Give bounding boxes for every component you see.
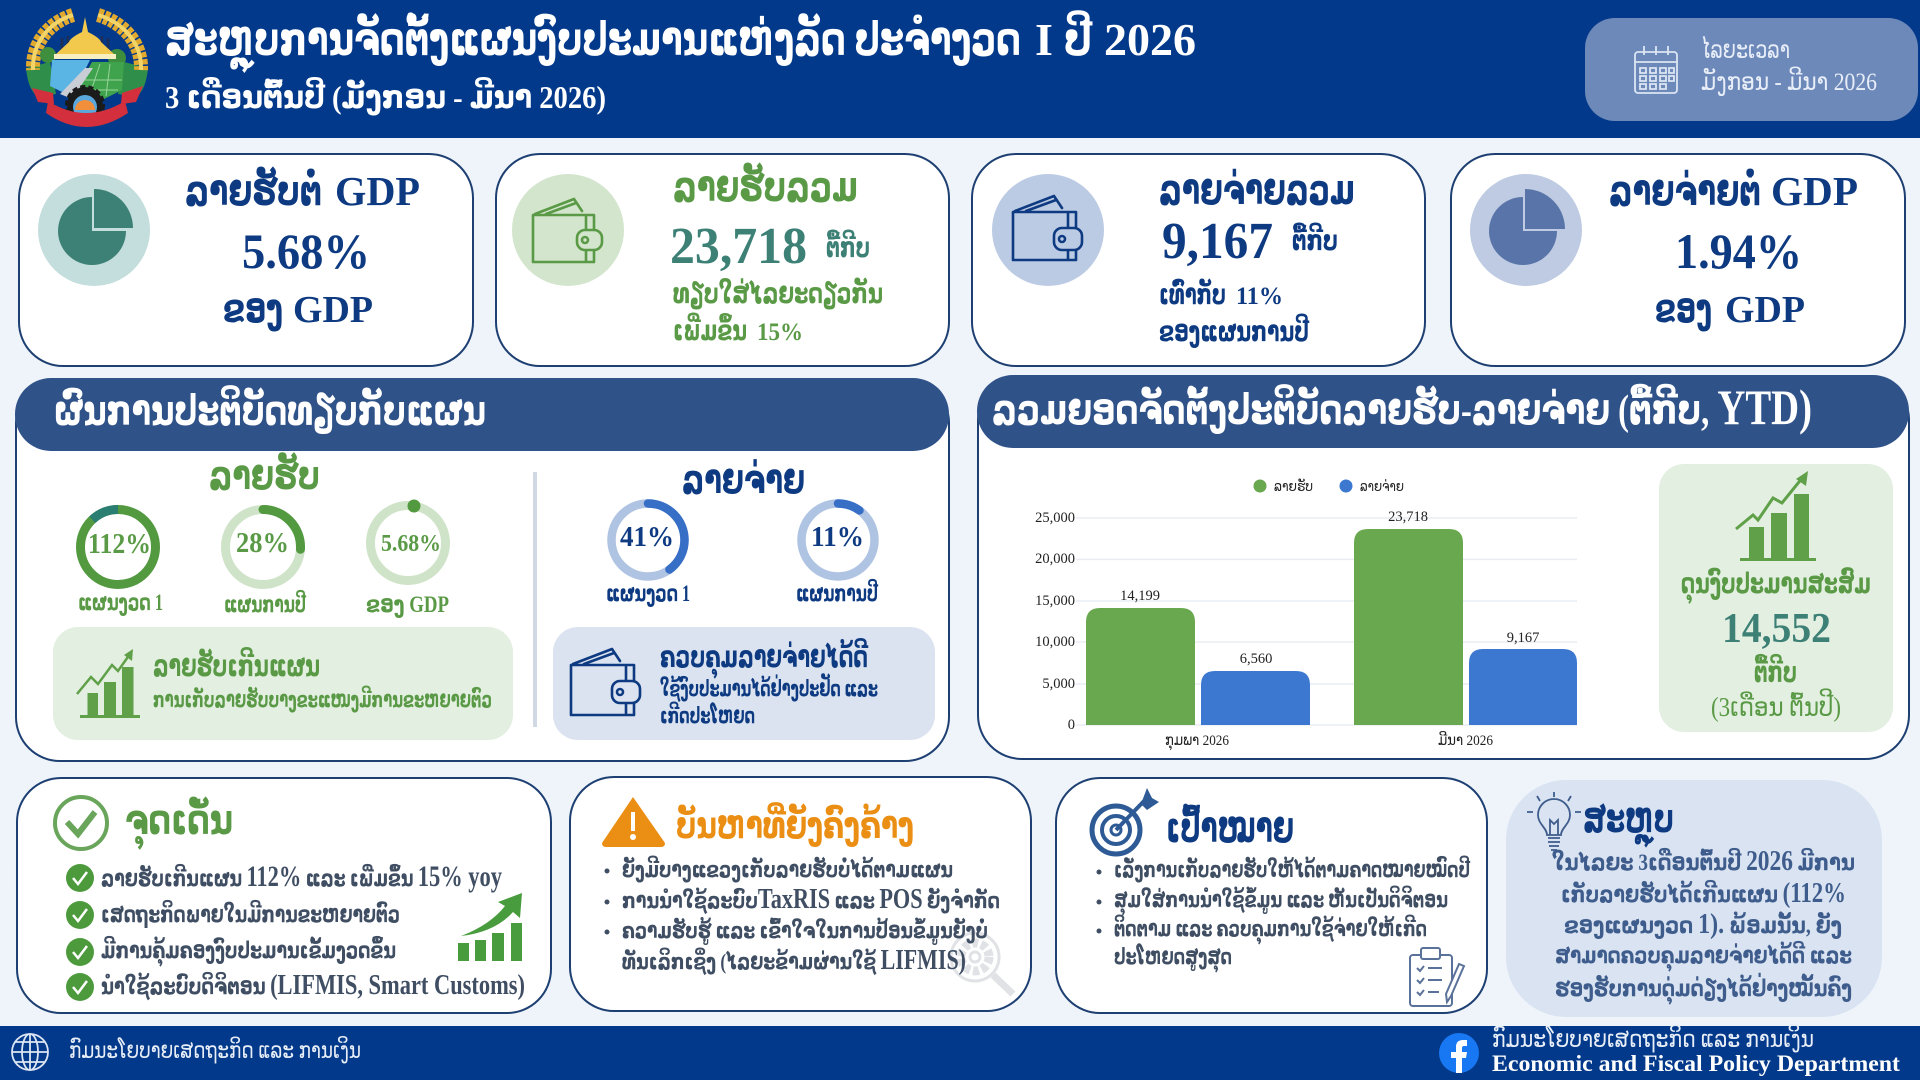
caption: ຂອງ [223,286,283,332]
heading: ລາຍຈ່າຍຕໍ່ [1609,167,1761,215]
callout: cumulative budget balance [1659,464,1893,732]
department name Lao: ກົມນະໂຍບາຍເສດຖະກິດ ແລະ ການເງິນ [1492,1024,1814,1053]
axis labels [1035,510,1075,733]
donut: 5.68% of GDP [366,500,449,618]
panel: targets [1056,778,1487,1013]
legend [1254,479,1404,495]
icon: rising bar chart [77,649,140,718]
unit: ຕື້ກີບ [1754,654,1797,689]
caption: ຂອງ [1655,286,1712,332]
summary text: ເກັບລາຍຮັບໄດ້ເກີນແຜນ (112% [1561,878,1846,909]
axis labels: 0 [1068,717,1075,733]
icon: target with arrow [1092,788,1159,854]
icon: check circle [55,797,107,849]
unit: ຕື້ກີບ [1292,222,1338,257]
category labels: ກຸມພາ 2026 [1165,733,1229,751]
bar chart [1035,479,1577,751]
heading: GDP [1771,168,1858,214]
comparison text: ທຽບໃສ່ໄລຍະດຽວກັນ [673,277,883,310]
highlight 3 [66,935,396,968]
callout title: ລາຍຮັບເກີນແຜນ [153,647,320,683]
value: 5.68% [242,223,370,279]
heading: GDP [335,168,420,214]
value: 23,718 [670,218,807,275]
donut: 112% of Q1 plan: 112% [88,529,151,560]
heading: ລາຍຮັບຕໍ່ [185,165,322,215]
caption [223,286,373,332]
value labels: 9,167 [1507,630,1539,646]
highlight 1: ລາຍຮັບເກີນແຜນ 112% ແລະ ເພີ່ມຂຶ້ນ 15% yoy [101,860,502,893]
panel: cumulative revenue and expenditure [977,375,1909,759]
donut: 11% of annual plan: ແຜນການປີ [796,578,879,606]
issue list: ຍັງມີບາງແຂວງເກັບລາຍຮັບບໍ່ໄດ້ຕາມແຜນ [622,856,953,882]
comparison text: ຂອງແຜນການປີ [1159,313,1310,348]
period value: ມັງກອນ - ມີນາ 2026 [1701,67,1877,96]
comparison text: 15% [757,319,803,346]
highlight 2 [66,899,400,929]
value: 14,552 [1722,606,1831,652]
donut: 5.68% of GDP: ຂອງ GDP [366,592,449,618]
title: I [1035,14,1053,65]
icon: globe [12,1034,48,1070]
heading: ສະຫຼຸບ [1583,796,1674,848]
heading: ລາຍຈ່າຍລວມ [1159,168,1355,214]
issue list: ທັນເລິກເຊິ່ງ (ໄລຍະຂ້າມຜ່ານໃຊ້ LIFMIS) [622,945,966,976]
subtitle: 3 ເດືອນຕົ້ນປີ (ມັງກອນ - ມີນາ 2026) [165,77,606,116]
legend: ລາຍຈ່າຍ [1360,479,1404,495]
icon: green wallet [512,174,624,286]
KPI card: revenue to GDP [19,154,473,366]
icon: rising bar chart [1736,471,1816,561]
title: ສະຫຼຸບການຈັດຕັ້ງແຜນງົບປະມານແຫ່ງລັດ ປະຈຳງວດ [165,12,1021,73]
donut: 28% of annual plan: 28% [236,528,289,559]
comparison text: 11% [1236,283,1283,310]
period note: (3ເດືອນ ຕົ້ນປີ) [1711,689,1841,722]
caption: GDP [1725,289,1805,331]
bars [1086,529,1577,725]
donut: 28% of annual plan [224,510,307,617]
donut: 112% of Q1 plan: ແຜນງວດ 1 [78,590,163,616]
issue list: ການນຳໃຊ້ລະບົບTaxRIS ແລະ POS ຍັງຈຳກັດ [622,884,1000,915]
summary text: ຂອງແຜນງວດ 1). ພ້ອມນັ້ນ, ຍັງ [1564,909,1842,940]
unit: ຕື້ກີບ [826,229,870,264]
highlight list [66,860,525,1001]
donut: 41% of Q1 plan [606,504,690,607]
footer band [0,1024,1920,1080]
icon: Lao national emblem [26,15,148,127]
header band [0,0,1920,138]
value labels: 6,560 [1240,651,1272,667]
summary text [1552,846,1855,1006]
axis labels: 15,000 [1035,593,1075,609]
heading: ເປົ້າໝາຍ [1166,802,1294,852]
panel: summary [1506,780,1882,1017]
summary text: ໃນໄລຍະ 3ເດືອນຕົ້ນປີ 2026 ມີການ [1552,846,1855,877]
comparison text: ເພີ່ມຂຶ້ນ [673,312,747,347]
donut: 41% of Q1 plan: 41% [620,522,674,553]
category labels: ມີນາ 2026 [1438,730,1493,749]
icon: wallet [571,649,640,715]
comparison text: ເທົ່າກັບ [1159,278,1226,311]
value labels [1120,509,1539,667]
axis labels: 10,000 [1035,634,1075,650]
callout text: ເກີດປະໂຫຍດ [660,702,755,728]
comparison text [673,277,883,347]
caption [1655,286,1805,332]
donut: 11% of annual plan [796,504,879,606]
panel heading bar: ຜົນການປະຕິບັດທຽບກັບແຜນ [54,384,486,435]
target list: ຕິດຕາມ ແລະ ຄວບຄຸມການໃຊ້ຈ່າຍໃຫ້ເກີດ [1114,915,1427,945]
target list: ສຸມໃສ່ການນຳໃຊ້ຂໍ້ມູນ ແລະ ຫັນເປັນດິຈິຕອນ [1114,887,1448,916]
donut: 112% of Q1 plan [78,510,163,616]
department name English: Economic and Fiscal Policy Department [1492,1051,1900,1076]
panel heading bar: ລວມຍອດຈັດຕັ້ງປະຕິບັດລາຍຮັບ-ລາຍຈ່າຍ (ຕື້ກີບ, YTD) [992,379,1812,435]
value labels: 14,199 [1120,588,1160,604]
legend: ລາຍຮັບ [1274,479,1313,495]
summary text: ຮອງຮັບການດຸ່ມດ່ຽງໄດ້ຢ່າງໝັ້ນຄົງ [1555,973,1852,1006]
target list [1096,856,1471,973]
period label: ໄລຍະເວລາ [1701,35,1790,64]
icon: clipboard checklist [1410,948,1464,1006]
callout text [660,673,878,728]
callout: expenditure well controlled [553,627,935,740]
donut: 28% of annual plan: ແຜນການປີ [224,589,307,617]
caption: GDP [293,289,373,331]
highlight 2: ເສດຖະກິດພາຍໃນມີການຂະຫຍາຍຕົວ [101,899,400,928]
heading: ຈຸດເດັ່ນ [125,795,233,851]
period badge [1585,18,1918,121]
panel: highlights [17,778,551,1013]
heading: ລາຍຮັບລວມ [673,161,858,211]
icon: facebook [1439,1033,1479,1073]
target list: ປະໂຫຍດສູງສຸດ [1114,943,1232,973]
highlight 4: ນຳໃຊ້ລະບົບດິຈິຕອນ (LIFMIS, Smart Customs) [101,969,525,1001]
KPI card: total expenditure [972,154,1425,366]
category labels [1165,730,1493,751]
panel: performance against plan [15,378,949,761]
icon: growth chart [458,893,522,961]
title: ປີ [1064,10,1093,65]
icon: pie chart blue [1470,174,1582,286]
axis labels: 20,000 [1035,551,1075,567]
icon: warning triangle [602,797,665,847]
icon: light bulb [1527,792,1581,850]
heading: ບັນຫາທີ່ຍັງຄົງຄ້າງ [676,801,914,847]
comparison text [1159,278,1310,348]
value: 9,167 [1162,213,1273,270]
callout: revenue above plan [53,627,513,740]
icon: calendar [1635,46,1677,93]
KPI card: expenditure to GDP [1451,154,1905,366]
value labels: 23,718 [1388,509,1428,525]
donut: 41% of Q1 plan: ແຜນງວດ 1 [606,581,690,607]
callout text: ໃຊ້ງົບປະມານໄດ້ຢ່າງປະຢັດ ແລະ [660,673,878,702]
donut: 11% of annual plan: 11% [811,522,864,553]
value: 1.94% [1675,223,1802,279]
revenue heading: ລາຍຮັບ [209,451,320,498]
highlight 3: ມີການຄຸ້ມຄອງງົບປະມານເຂັ້ມງວດຂຶ້ນ [101,935,396,968]
target list: ເລັ່ງການເກັບລາຍຮັບໃຫ້ໄດ້ຕາມຄາດໝາຍໝົດປີ [1114,856,1471,882]
panel heading bar [15,378,949,451]
panel: outstanding issues [570,777,1031,1011]
issue list [604,856,1000,976]
axis labels: 5,000 [1042,676,1075,692]
KPI card: total revenue [496,154,949,366]
expenditure heading: ລາຍຈ່າຍ [682,457,805,502]
icon: faint gear with magnifier [951,933,1013,994]
callout text: ການເກັບລາຍຮັບບາງຂະແໜງມີການຂະຫຍາຍຕົວ [153,686,492,712]
icon: blue wallet [992,174,1104,286]
callout title: ຄວບຄຸມລາຍຈ່າຍໄດ້ດີ [660,638,869,679]
department name left: ກົມນະໂຍບາຍເສດຖະກິດ ແລະ ການເງິນ [69,1035,361,1063]
icon: pie chart teal [38,174,150,286]
summary text: ສາມາດຄວບຄຸມລາຍຈ່າຍໄດ້ດີ ແລະ [1555,940,1852,973]
issue list: ຄວາມຮັບຮູ້ ແລະ ເຂົ້າໃຈໃນການປ້ອນຂໍ້ມູນຍັງບໍ່ [622,917,988,945]
axis labels: 25,000 [1035,510,1075,526]
title: 2026 [1104,14,1196,65]
donut: 5.68% of GDP: 5.68% [381,531,441,557]
